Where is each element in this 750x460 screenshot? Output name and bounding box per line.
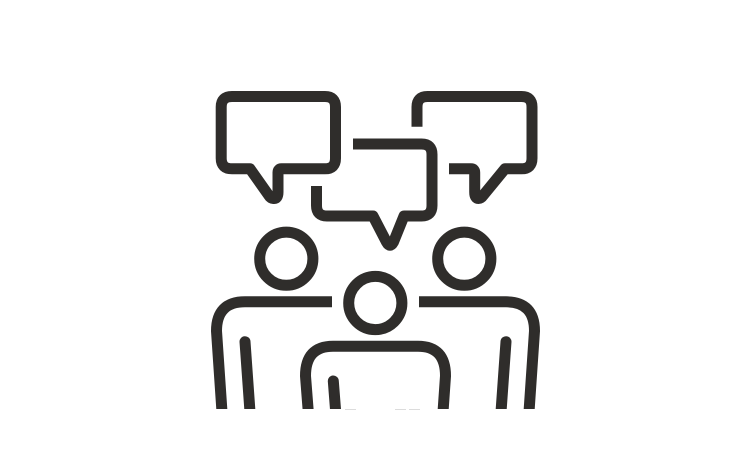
icon: right speech bubble	[417, 96, 532, 198]
left person arm	[245, 342, 250, 412]
left person head	[260, 232, 313, 285]
icon: left person	[216, 232, 332, 412]
left person shoulders	[216, 302, 332, 412]
icon: group of three people talking	[211, 91, 540, 410]
icon: left speech bubble	[221, 96, 336, 199]
icon: right person	[419, 232, 534, 412]
centre person head	[349, 276, 402, 330]
icon: centre person	[306, 276, 446, 412]
centre person arm	[333, 381, 336, 412]
right person shoulders	[419, 302, 534, 412]
faint clipped edge marks	[345, 409, 420, 410]
right person arm	[501, 342, 506, 412]
icon: middle speech bubble	[316, 144, 432, 245]
right person head	[438, 232, 491, 285]
centre person shoulders	[306, 346, 446, 412]
icon artwork	[216, 96, 534, 412]
